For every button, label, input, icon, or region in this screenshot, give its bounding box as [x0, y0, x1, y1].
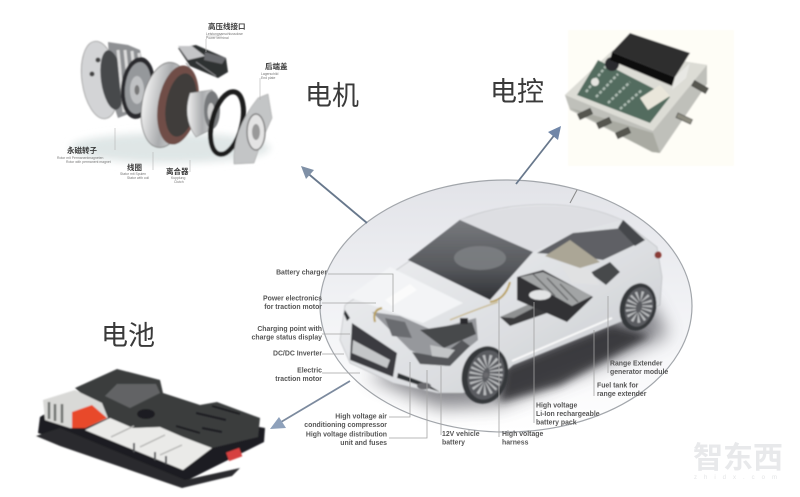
- translucent hood: [348, 267, 463, 323]
- motor: end plate: [234, 94, 272, 164]
- label: charging point: charge status display: [252, 334, 322, 342]
- motor: high-voltage connector block: [178, 45, 228, 78]
- battery: red connector: [226, 448, 242, 461]
- label: range extender: Range Extender: [610, 360, 663, 368]
- label: coil: Stator mit Spulen: [120, 172, 146, 176]
- panel: cutaway car: [340, 205, 668, 409]
- label: permanent magnet rotor: [57, 145, 111, 164]
- small pointer on ellipse: [570, 190, 577, 203]
- car leader lines: [322, 274, 608, 438]
- label: battery pack: battery pack: [536, 420, 577, 426]
- panel: battery pack: [36, 369, 265, 488]
- car labels: left side: [252, 270, 327, 383]
- label: rear end cover: [261, 61, 288, 80]
- car roof highlight: [460, 206, 622, 252]
- label: harness: harness: [502, 440, 529, 446]
- label: distribution unit: [306, 432, 387, 447]
- label: fuel tank: range extender: [597, 391, 647, 398]
- label: 12V battery: [442, 431, 480, 446]
- motor callouts: [57, 21, 288, 184]
- label: power electronics: [263, 296, 322, 311]
- label: high-voltage connector: Leistungsanschlussdose: [206, 32, 243, 36]
- label: range extender: [610, 360, 668, 376]
- arrow: car to motor: [301, 166, 367, 223]
- label: air conditioning compressor: conditioning compressor: [304, 422, 387, 429]
- controller: black cover: [610, 33, 690, 90]
- panel: motor controller: [565, 30, 734, 166]
- front wheel: [456, 341, 514, 409]
- label: harness: High voltage: [502, 431, 544, 438]
- car body: [340, 205, 662, 393]
- label: permanent magnet rotor: 永磁转子: [67, 145, 97, 155]
- battery: cells in rear module: [43, 390, 108, 428]
- watermark: zhidx.com: [694, 475, 784, 481]
- front grille: [344, 310, 440, 392]
- controller: housing: [565, 50, 707, 153]
- motor: inner rotor: [187, 90, 220, 137]
- label: air conditioning compressor: High voltage air: [335, 414, 387, 420]
- heading: battery: 电池: [101, 321, 155, 351]
- label: high-voltage connector: 高压线接口: [208, 21, 246, 31]
- label: 12V battery: 12V vehicle: [442, 431, 480, 438]
- label: high-voltage connector: Power terminal: [206, 36, 229, 40]
- label: coil: 线圈: [127, 162, 142, 172]
- panel: exploded motor: [70, 39, 272, 164]
- ellipse around the car: [320, 180, 692, 432]
- label: DC/DC inverter: DC/DC Inverter: [273, 350, 322, 358]
- controller: green circuit board: [577, 57, 670, 123]
- heading: motor: 电机: [305, 81, 359, 111]
- windshield: [408, 220, 533, 300]
- label: fuel tank: Fuel tank for: [597, 382, 639, 390]
- sill line: [512, 318, 612, 361]
- battery: white front cells: [85, 418, 212, 470]
- watermark: 智东西: [693, 442, 783, 475]
- label: clutch: 离合器: [166, 166, 189, 176]
- label: battery pack: High voltage: [536, 402, 578, 410]
- arrow: car to battery: [270, 381, 350, 429]
- label: battery pack: Li-Ion rechargeable: [536, 411, 600, 418]
- label: rear end cover: Lagerschild: [261, 72, 278, 76]
- label: permanent magnet rotor: Rotor mit Permanentmagneten: [57, 156, 103, 160]
- motor: stator with copper winding: [135, 59, 205, 151]
- label: fuel tank: [597, 382, 647, 398]
- label: 12V battery: battery: [442, 440, 465, 446]
- battery: black tray: [36, 395, 265, 488]
- arrow: car to controller: [516, 126, 561, 184]
- label: electric traction motor: Electric: [297, 368, 322, 374]
- label: battery charger: Battery charger: [276, 270, 327, 276]
- label: distribution unit: unit and fuses: [340, 440, 387, 447]
- rear wheel: [615, 279, 661, 335]
- car labels: bottom and right: [304, 360, 668, 447]
- label: permanent magnet rotor: Rotor with permanent magnet: [66, 160, 111, 164]
- label: clutch: Kupplung: [171, 176, 185, 180]
- battery: dark top cover: [75, 369, 260, 448]
- label: electric traction motor: traction motor: [275, 376, 322, 383]
- label: power electronics: for traction motor: [264, 304, 322, 311]
- engine bay cutaway: [372, 282, 510, 366]
- side and rear windows: [537, 220, 662, 268]
- motor: black sealing ring: [205, 88, 249, 158]
- label: air conditioning compressor: [304, 414, 387, 429]
- label: clutch: Clutch: [174, 180, 184, 184]
- label: harness: [502, 431, 544, 446]
- label: power electronics: Power electronics: [263, 296, 322, 302]
- motor: rotor housing: [77, 39, 158, 121]
- label: distribution unit: High voltage distribution: [306, 432, 387, 438]
- label: battery pack: [536, 402, 600, 426]
- label: charging point: [252, 326, 322, 342]
- label: clutch: [166, 166, 189, 184]
- label: coil: Stator with coil: [127, 176, 149, 180]
- car ground shadow: [368, 300, 668, 408]
- controller: pale backdrop: [568, 30, 734, 166]
- label: charging point: Charging point with: [257, 326, 322, 333]
- battery pack in car floor: [500, 270, 593, 326]
- label: rear end cover: 后端盖: [265, 61, 288, 71]
- rear engine and tank: [560, 262, 620, 285]
- label: range extender: generator module: [610, 369, 668, 376]
- controller: cable connectors: [577, 80, 708, 139]
- motor floor shadow: [70, 133, 270, 163]
- label: rear end cover: End plate: [261, 76, 275, 80]
- heading: controller: 电控: [490, 77, 544, 107]
- label: high-voltage connector: [206, 21, 246, 40]
- label: electric traction motor: [275, 368, 322, 383]
- label: coil: [120, 162, 149, 180]
